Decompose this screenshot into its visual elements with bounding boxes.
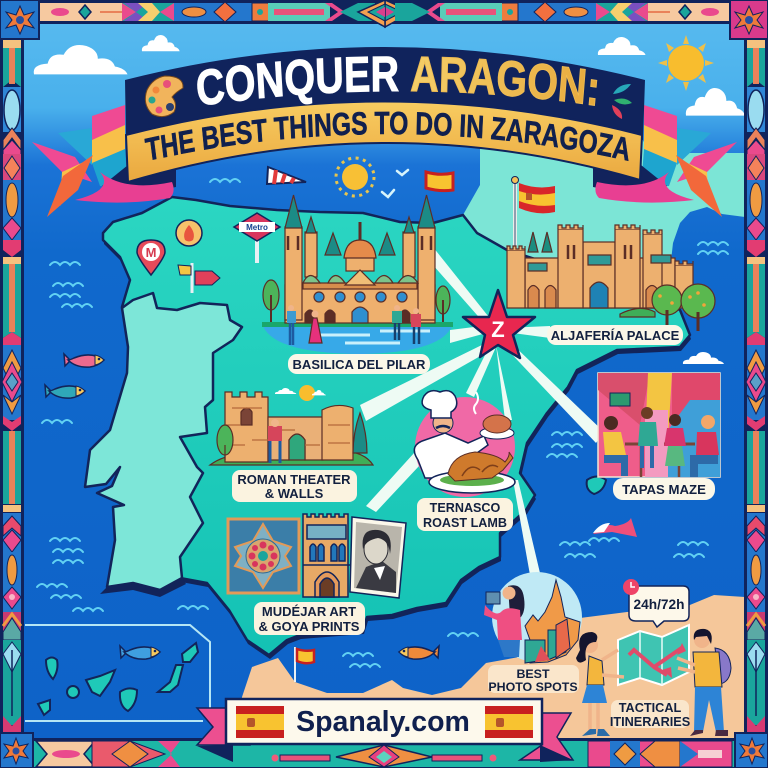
map: Africa coast: [236, 595, 745, 738]
title line 1: CONQUER ARAGON:: [197, 56, 598, 106]
label: tactical itineraries: TACTICAL: [619, 701, 681, 715]
Mudéjar tile: [228, 519, 299, 593]
clouds and sun in the sky: [34, 35, 745, 116]
title line 2: THE BEST THINGS TO DO IN ZARAGOZA: [144, 112, 628, 162]
label: tactical itineraries: [610, 700, 690, 729]
fish: [45, 354, 439, 659]
label: Ternasco roast lamb: ROAST LAMB: [423, 516, 507, 530]
metro sign icon: Metro: [246, 223, 268, 232]
label: Mudéjar art and Goya prints: MUDÉJAR ART: [262, 604, 356, 619]
Zaragoza star marker: [463, 290, 535, 358]
label: best photo spots: [488, 665, 579, 694]
map pin icon: M: [146, 245, 156, 260]
label: tactical itineraries: ITINERARIES: [610, 715, 690, 729]
small icons in northern sea: pennant, sun, birds, flag: [267, 158, 453, 197]
label: Tapas Maze: TAPAS MAZE: [622, 482, 706, 497]
title ribbon tail left: [32, 105, 176, 217]
palette icon: [145, 76, 183, 117]
direction flags icon: [178, 263, 220, 293]
small Spanish flag on Africa coast: [295, 647, 314, 682]
label: Roman Theater and walls: [232, 470, 357, 502]
tactical itineraries illustration: [576, 625, 731, 736]
title line 1: [197, 56, 598, 106]
label: Ternasco roast lamb: TERNASCO: [430, 501, 501, 515]
Roman Theater and walls illustration: [210, 385, 373, 465]
title ribbon tail right: [593, 105, 737, 217]
Mudéjar tower: [303, 514, 350, 597]
balearic islands and small cloud: [587, 352, 724, 537]
rays from star to attractions: [360, 247, 604, 575]
flame badge icon: [176, 220, 202, 246]
label: Roman Theater and walls: & WALLS: [265, 486, 324, 501]
flag: Spain left: [236, 706, 284, 738]
title banner: [125, 47, 645, 181]
chef with roast lamb illustration: [414, 391, 515, 497]
footer ribbon ends: [197, 708, 573, 762]
label: Basilica del Pilar: BASILICA DEL PILAR: [293, 357, 426, 372]
sea waves: [37, 179, 728, 667]
best photo spots illustration: [484, 572, 582, 663]
canary islands inset: [25, 625, 210, 721]
label: best photo spots: BEST: [516, 667, 550, 681]
speech bubble: 24h/72h with clock icon: 24h/72h: [634, 597, 684, 612]
Goya portrait print: [350, 517, 406, 598]
label: Ternasco roast lamb: [417, 498, 513, 531]
map: Portugal: [85, 293, 242, 597]
flag: Spain right: [485, 706, 533, 738]
label: best photo spots: PHOTO SPOTS: [488, 680, 578, 694]
Basilica del Pilar illustration: [262, 195, 453, 354]
metro sign icon: [234, 213, 280, 263]
footer brand box: [226, 699, 542, 744]
map pin icon: [137, 240, 165, 275]
label: Aljafería Palace: ALJAFERÍA PALACE: [551, 328, 680, 343]
brand name: Spanaly.com: [296, 706, 470, 738]
label: Tapas Maze: [613, 478, 715, 500]
Aljafería Palace illustration: [507, 225, 715, 331]
label: Mudéjar art and Goya prints: & GOYA PRINTS: [259, 619, 360, 634]
Tapas Maze scene: [598, 373, 720, 477]
spanish flag on pole: [512, 176, 555, 252]
label: Roman Theater and walls: ROMAN THEATER: [237, 472, 351, 487]
map: Spain: [103, 197, 691, 659]
speech bubble: 24h/72h with clock icon: [623, 579, 689, 627]
Zaragoza star marker: Z: [491, 317, 505, 342]
decorative leaves: [612, 84, 632, 119]
map: France: [463, 135, 745, 350]
label: Mudéjar art and Goya prints: [254, 602, 365, 635]
